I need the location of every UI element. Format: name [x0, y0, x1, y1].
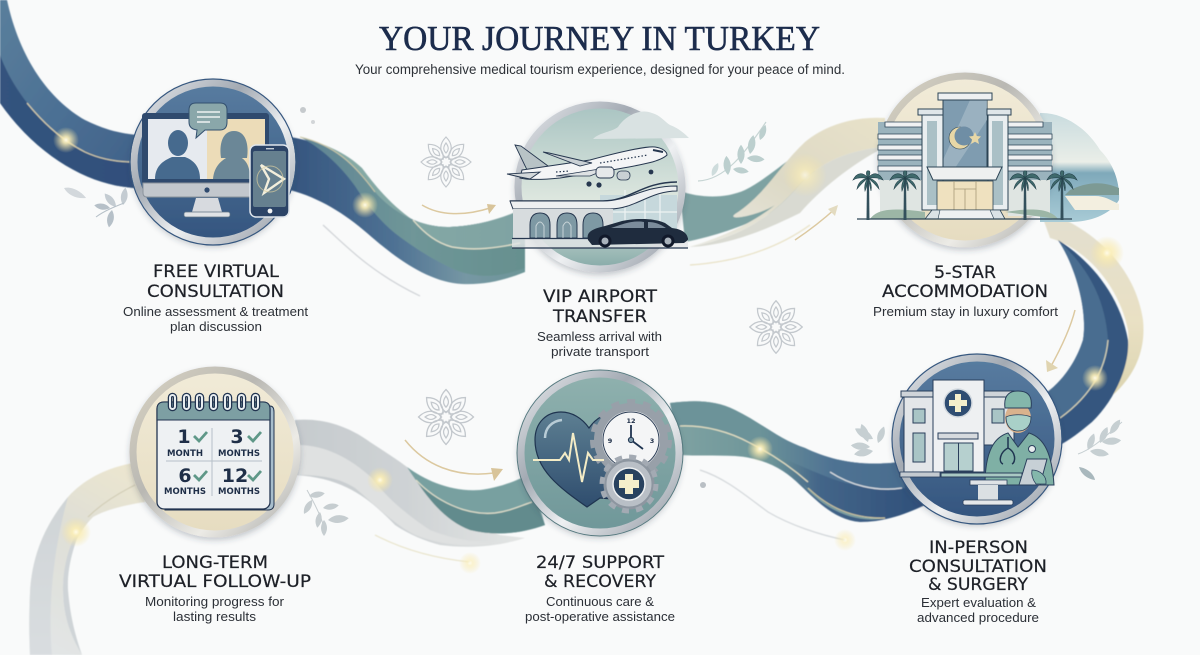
step: 24/7 support and recovery — [517, 370, 683, 624]
heading: 24/7 SUPPORT — [536, 553, 665, 573]
description — [917, 595, 1039, 625]
description — [537, 329, 662, 359]
ribbon: transfer to accommodation — [680, 118, 885, 265]
icon: calendar badge: MONTH — [167, 449, 203, 459]
icon: heart and gears badge: 9 — [608, 437, 613, 445]
heading: VIP AIRPORT — [543, 287, 658, 307]
description: advanced procedure — [917, 610, 1039, 625]
heading: IN-PERSON — [929, 538, 1028, 558]
description: Seamless arrival with — [537, 329, 662, 344]
heading — [119, 553, 311, 592]
step: vip airport transfer — [507, 105, 689, 359]
sparkles on ribbons — [53, 127, 1124, 574]
heading: ACCOMMODATION — [882, 282, 1048, 302]
gold direction arrows — [405, 204, 1075, 481]
icon: heart and gears badge — [517, 370, 683, 536]
ribbon: support to follow-up — [295, 420, 545, 562]
ribbon: accommodation to surgery — [1040, 210, 1143, 446]
heading — [543, 287, 658, 327]
icon: plane terminal and car badge — [507, 105, 689, 269]
description: Monitoring progress for — [145, 594, 285, 609]
description: Online assessment & treatment — [123, 304, 308, 319]
ribbon: consultation to transfer — [290, 137, 525, 296]
icon: calendar badge: 12 — [222, 465, 248, 487]
icon: calendar badge: 6 — [178, 465, 192, 487]
heading: CONSULTATION — [147, 282, 284, 302]
heading: FREE VIRTUAL — [153, 262, 280, 282]
icon: calendar badge: MONTHS — [218, 449, 260, 459]
icon: video call badge — [130, 79, 296, 245]
icon: heart and gears badge: 12 — [626, 417, 636, 425]
icon: hotel badge — [853, 76, 1119, 244]
title: YOUR JOURNEY IN TURKEY — [379, 19, 820, 58]
description: lasting results — [173, 609, 257, 624]
description: private transport — [551, 344, 649, 359]
description — [145, 594, 285, 624]
description: Expert evaluation & — [921, 595, 1036, 610]
icon: calendar badge: 3 — [230, 426, 244, 448]
heading — [909, 538, 1047, 595]
icon: hospital and surgeon badge — [892, 354, 1062, 524]
description: post-operative assistance — [525, 609, 675, 624]
step: 5-star accommodation — [853, 76, 1119, 319]
heading — [536, 553, 665, 592]
ribbon: surgery to support — [670, 401, 925, 540]
icon: calendar badge: MONTHS — [218, 487, 260, 497]
icon: heart and gears badge: 3 — [650, 437, 654, 445]
icon: calendar badge — [133, 370, 297, 534]
ribbon: top left navy — [0, 0, 140, 188]
heading — [882, 263, 1048, 302]
heading: & SURGERY — [928, 575, 1029, 595]
description: plan discussion — [170, 319, 262, 334]
icon: calendar badge: 1 — [177, 426, 191, 448]
description — [525, 594, 675, 624]
heading — [147, 262, 284, 302]
heading: VIRTUAL FOLLOW-UP — [119, 572, 311, 592]
heading: & RECOVERY — [544, 572, 657, 592]
decorative leaves — [64, 107, 1123, 536]
description: Premium stay in luxury comfort — [873, 304, 1058, 319]
heading: TRANSFER — [552, 307, 647, 327]
step: in-person consultation and surgery — [892, 354, 1062, 625]
icon: calendar badge: MONTHS — [164, 487, 206, 497]
decorative mandalas — [418, 137, 802, 444]
step: free virtual consultation — [123, 79, 308, 334]
heading: LONG-TERM — [162, 553, 268, 573]
heading: CONSULTATION — [909, 557, 1047, 577]
step: long-term virtual follow-up — [119, 370, 311, 624]
ribbon: lower left arc — [29, 462, 145, 655]
subtitle: Your comprehensive medical tourism experience, designed for your peace of mind. — [355, 62, 845, 77]
heading: 5-STAR — [934, 263, 996, 283]
description: Continuous care & — [546, 594, 654, 609]
description — [123, 304, 308, 334]
